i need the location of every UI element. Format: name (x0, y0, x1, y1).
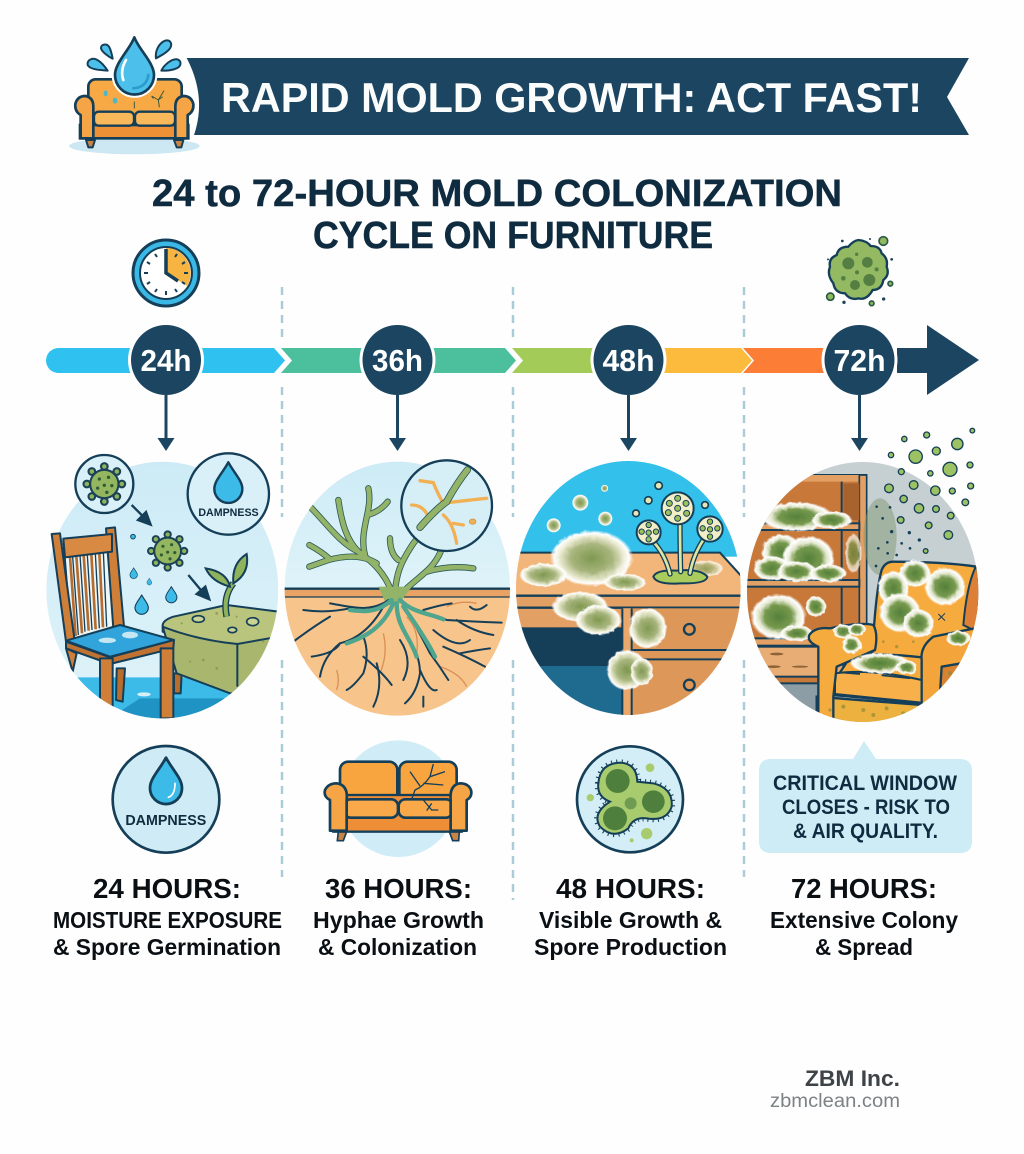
marker: 48h (590, 322, 666, 451)
marker: 24h: 24h (140, 343, 192, 378)
step text: 72 hours (770, 873, 958, 960)
footer: company credit: zbmclean.com (770, 1091, 900, 1112)
marker: 72h (822, 322, 898, 451)
timeline bar (46, 325, 979, 395)
marker: 36h: 36h (372, 343, 423, 378)
icon: mold spore colony (827, 237, 893, 306)
step text: 72 hours: & Spread (815, 934, 913, 960)
icon: cracked sofa (325, 740, 471, 857)
step text: 24 hours: MOISTURE EXPOSURE (53, 907, 282, 933)
step text: 48 hours: 48 HOURS: (556, 873, 705, 904)
step text: 48 hours: Visible Growth & (539, 907, 722, 933)
step text: 72 hours: Extensive Colony (770, 907, 958, 933)
icon: wet sofa with water drop (69, 37, 200, 154)
banner heading: RAPID MOLD GROWTH: ACT FAST! (221, 74, 922, 121)
marker: 48h: 48h (602, 343, 654, 378)
step text: 24 hours (53, 873, 282, 960)
inset: hyphae close-up (401, 460, 492, 551)
icon: dampness badge (113, 746, 219, 853)
callout: critical window (759, 741, 972, 853)
callout: critical window: & AIR QUALITY. (793, 820, 938, 843)
illustration: moldy shelf and armchair (743, 428, 983, 730)
illustration: mold growing on desk (513, 460, 747, 717)
airborne spores (885, 428, 975, 553)
subtitle: CYCLE ON FURNITURE (313, 215, 713, 257)
callout: critical window: CRITICAL WINDOW (773, 772, 957, 795)
footer: company credit (770, 1066, 900, 1112)
step text: 36 hours: & Colonization (318, 934, 477, 960)
step text: 36 hours: 36 HOURS: (325, 873, 472, 904)
subtitle (152, 173, 842, 257)
step text: 36 hours: Hyphae Growth (313, 907, 484, 933)
title banner (187, 58, 969, 135)
inset: dampness (188, 453, 269, 535)
marker: 24h (128, 322, 204, 451)
subtitle: 24 to 72-HOUR MOLD COLONIZATION (152, 173, 842, 215)
marker: 36h (360, 322, 436, 451)
step text: 24 hours: 24 HOURS: (93, 873, 241, 904)
step text: 36 hours (313, 873, 484, 960)
callout: critical window: CLOSES - RISK TO (782, 796, 950, 819)
icon: mold colony in petri dish (577, 746, 683, 852)
icon: dampness badge: DAMPNESS (125, 813, 207, 829)
step text: 48 hours: Spore Production (534, 934, 727, 960)
icon: clock (133, 240, 199, 306)
sporangia stalks (633, 482, 723, 584)
marker: 72h: 72h (834, 343, 886, 378)
step text: 24 hours: & Spore Germination (53, 934, 281, 960)
illustration: chair and ottoman in damp room (43, 453, 283, 720)
step text: 48 hours (534, 873, 727, 960)
inset: dampness: DAMPNESS (198, 507, 259, 519)
illustration: hyphae branching through surface (283, 460, 513, 722)
inset: spore (75, 455, 133, 513)
footer: company credit: ZBM Inc. (805, 1066, 900, 1091)
step text: 72 hours: 72 HOURS: (791, 873, 937, 904)
